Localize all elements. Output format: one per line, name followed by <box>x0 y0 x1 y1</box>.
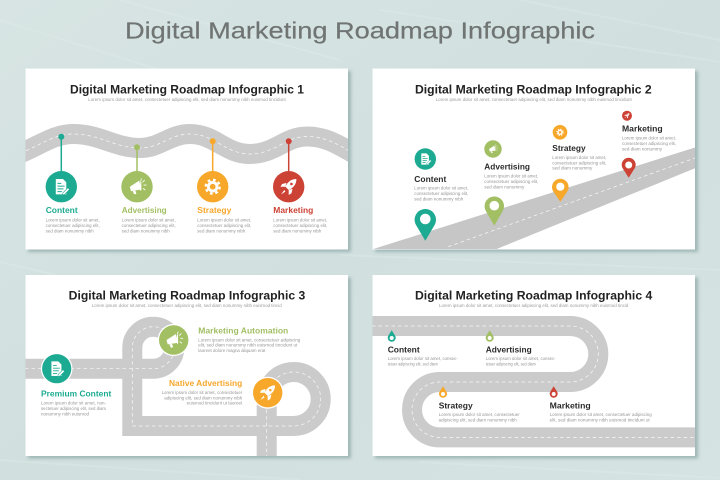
step: marketing automation <box>158 324 301 356</box>
step: advertising: Advertising <box>122 205 167 215</box>
step: advertising: sed diam nonummy <box>484 184 525 189</box>
step: advertising: Advertising <box>486 345 532 355</box>
step: marketing: Lorem ipsum dolor sit amet, consectetuer adipiscing <box>550 412 652 417</box>
step: marketing automation: elit, sed diam nonummy nibh euismod tincidunt ut <box>198 343 298 348</box>
panel: roadmap 2 <box>372 68 698 252</box>
step: content <box>388 330 458 366</box>
step: marketing: Marketing <box>273 205 313 215</box>
subtitle 2: Lorem ipsum dolor sit amet, consectetuer adipiscing elit, sed diam nonummy nibh euismod tincidunt <box>436 97 633 102</box>
step: marketing automation: Lorem ipsum dolor sit amet, consectetuer adipiscing <box>198 337 301 342</box>
step: marketing: elit, sed diam nonummy nibh euismod tincidunt ut <box>550 417 651 422</box>
step: advertising: sed diam nonummy nibh <box>122 228 170 233</box>
step: advertising: Lorem ipsum dolor sit amet, <box>484 174 538 179</box>
step: strategy: consectetuer adipiscing elit, <box>552 160 606 165</box>
diagonal road <box>373 148 695 249</box>
panel: roadmap 4 <box>372 275 698 458</box>
step: strategy: Strategy <box>197 205 232 215</box>
step: marketing: sed diam nonummy <box>622 146 663 151</box>
step: marketing <box>550 386 652 422</box>
subtitle 4: Lorem ipsum dolor sit amet, consectetuer adipiscing elit, sed diam nonummy nibh euismod tincid <box>439 303 629 308</box>
step: strategy: Strategy <box>552 143 586 153</box>
step: content: Content <box>46 205 78 215</box>
step: native advertising: Lorem ipsum dolor sit amet, consectetuer <box>162 390 243 395</box>
step: content: sed diam nonummy nibh <box>46 228 94 233</box>
subtitle 1: Lorem ipsum dolor sit amet, consectetuer adipiscing elit, sed diam nonummy nibh euismod tincidunt <box>88 97 287 102</box>
step: strategy: sed diam nonummy <box>552 166 593 171</box>
step: strategy: sed diam nonummy nibh <box>197 228 246 233</box>
step: strategy <box>439 386 520 422</box>
step: content: consectetuer adipiscing elit, <box>414 191 468 196</box>
main title: Digital Marketing Roadmap Infographic <box>125 18 595 44</box>
step: strategy: Strategy <box>439 401 473 411</box>
serpentine road <box>372 326 696 437</box>
step: content <box>46 134 100 233</box>
step: native advertising: adipiscing elit, sed diam nonummy nibh <box>164 395 243 400</box>
step: premium content: Lorem ipsum dolor sit amet, non- <box>41 401 107 406</box>
step: content: Lorem ipsum dolor sit amet, <box>414 186 468 191</box>
step: advertising: consectetuer adipiscing elit, <box>122 223 176 228</box>
panel: roadmap 1 <box>20 68 353 252</box>
step: marketing automation: laoreet dolore magna aliquam erat <box>198 348 266 353</box>
step: strategy: adipiscing elit, sed diam nonummy nibh <box>439 417 517 422</box>
step: advertising: Lorem ipsum dolor sit amet, consec- <box>486 356 556 361</box>
step: marketing: Marketing <box>550 401 591 411</box>
step: marketing <box>622 111 676 178</box>
step: advertising: tetuer adipiscing elit, sed diam <box>486 361 536 366</box>
step: marketing: consectetuer adipiscing elit, <box>273 223 327 228</box>
heading 3: Digital Marketing Roadmap Infographic 3 <box>69 288 306 302</box>
heading 4: Digital Marketing Roadmap Infographic 4 <box>415 288 653 302</box>
subtitle 3: Lorem ipsum dolor sit amet, consectetuer adipiscing elit, sed diam nonummy nibh euismod tincid <box>92 303 282 308</box>
step: premium content: Premium Content <box>41 388 111 398</box>
step: strategy: Lorem ipsum dolor sit amet, <box>197 218 251 223</box>
step: native advertising: Native Advertising <box>169 378 242 388</box>
step: marketing: sed diam nonummy nibh <box>273 228 322 233</box>
step: advertising <box>121 144 176 233</box>
step: advertising <box>486 330 556 366</box>
step: content: sed diam nonummy nibh <box>414 196 464 201</box>
step: strategy <box>552 125 606 202</box>
step: advertising <box>484 140 538 226</box>
step: content <box>414 148 468 241</box>
step: strategy: Lorem ipsum dolor sit amet, consectetuer <box>439 412 520 417</box>
step: marketing: consectetuer adipiscing elit, <box>622 141 676 146</box>
step: advertising: Advertising <box>484 162 530 172</box>
step: marketing <box>273 138 327 233</box>
step: premium content: sectetuer adipiscing elit, sed diam <box>41 406 106 411</box>
wavy road <box>20 134 353 154</box>
step: marketing automation: Marketing Automation <box>198 325 288 335</box>
step: marketing: Marketing <box>622 124 663 134</box>
step: native advertising: euismod tincidunt ut laoreet <box>187 401 243 406</box>
step: strategy <box>197 138 251 233</box>
step: strategy: Lorem ipsum dolor sit amet, <box>552 155 606 160</box>
step: content: Lorem ipsum dolor sit amet, <box>46 218 100 223</box>
step: content: Lorem ipsum dolor sit amet, consec- <box>388 356 458 361</box>
step: premium content: nonummy nibh euismod <box>41 411 90 416</box>
step: premium content <box>41 353 111 416</box>
step: advertising: consectetuer adipiscing elit, <box>484 179 538 184</box>
step: advertising: Lorem ipsum dolor sit amet, <box>122 218 176 223</box>
step: native advertising <box>162 377 284 409</box>
step: content: consectetuer adipiscing elit, <box>46 223 100 228</box>
step: marketing: Lorem ipsum dolor sit amet, <box>622 136 676 141</box>
looping road <box>25 327 321 456</box>
step: content: tetuer adipiscing elit, sed diam <box>388 361 438 366</box>
panel: roadmap 3 <box>25 275 351 458</box>
step: content: Content <box>414 174 446 184</box>
heading 1: Digital Marketing Roadmap Infographic 1 <box>70 82 304 96</box>
step: marketing: Lorem ipsum dolor sit amet, <box>273 218 327 223</box>
heading 2: Digital Marketing Roadmap Infographic 2 <box>415 82 652 96</box>
step: strategy: consectetuer adipiscing elit, <box>197 223 251 228</box>
step: content: Content <box>388 345 420 355</box>
